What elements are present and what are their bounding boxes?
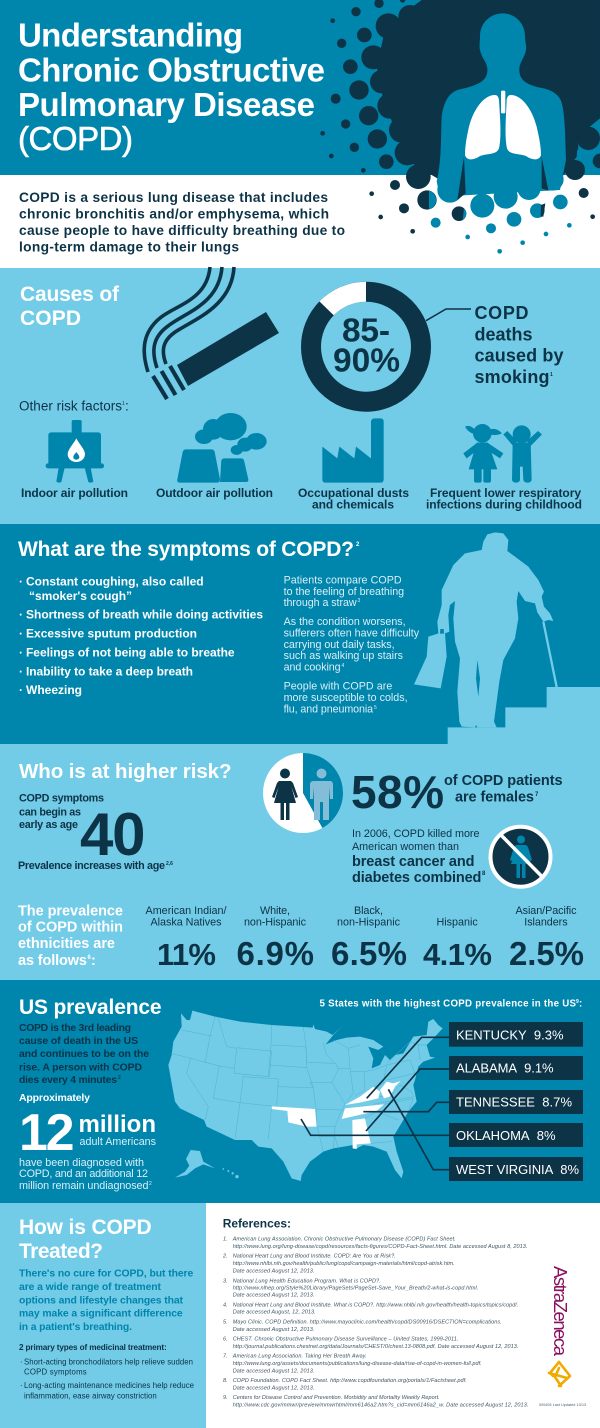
list: references: National Heart Lung and Blood Institute. What is COPD?. http://www.nhlbi.nih.gov/health/health-topics/topics/copd/.: [233, 1302, 518, 1308]
donut chart: 85-90%: 90%: [333, 343, 400, 380]
illustration: elderly person with cane on stairs: [414, 532, 600, 744]
text: symptom details: 5: [374, 705, 377, 711]
text: symptom details: and cooking: [284, 662, 341, 674]
text: age 40: Prevalence increases with age: [18, 860, 165, 872]
title: Chronic Obstructive: [18, 52, 325, 88]
list: symptoms: ·: [19, 575, 23, 589]
panel: who is at higher risk: [0, 744, 600, 980]
list: references: http://www.nhlbi.nih.gov/health/public/lung/copd/campaign-materials/html/copd-atrisk.htm.: [233, 1261, 455, 1267]
logo: AstraZeneca wordmark: AstraZeneca: [550, 1266, 571, 1357]
intro text: COPD is a serious lung disease that includes: [19, 190, 328, 205]
map: United States: [168, 1011, 450, 1181]
list: references: http://www.lung.org/assets/documents/publications/lung-disease-data/rise-of-copd-in-women-full.pdf.: [233, 1361, 482, 1367]
stat: 58% females: of COPD patients: [444, 773, 563, 789]
list: symptoms: ·: [19, 627, 23, 641]
stat: Black: 6.5%: [331, 935, 407, 972]
stat: Asian/Pacific Islanders: Asian/Pacific: [516, 905, 577, 917]
heading: higher risk: Who is at higher risk?: [19, 760, 232, 783]
list: symptoms: ·: [19, 665, 23, 679]
text: symptom details: 3: [358, 598, 360, 604]
stat: White: White,: [260, 905, 290, 917]
heading: top 5 states: 9: [576, 999, 579, 1005]
list: references: Date accessed August 12, 2013.: [233, 1293, 314, 1299]
callout: COPD deaths caused by smoking: smoking: [474, 367, 550, 387]
heading: treated: Treated?: [19, 1240, 103, 1263]
text: medicinal treatment: COPD symptoms: [24, 1367, 87, 1376]
intro text: cause people to have difficulty breathing due to: [19, 223, 345, 238]
text: leading cause of death: rise. A person with COPD: [19, 1063, 142, 1074]
illustration: body with lungs and dots: [320, 0, 600, 254]
text: 2006 comparison: In 2006, COPD killed more: [352, 828, 480, 840]
text: age 40: 40: [80, 801, 146, 868]
text: age 40: [18, 793, 173, 872]
list: references: Date accessed August 12, 2013.: [233, 1385, 314, 1391]
text: job code: 000405 Last Updated 10/13: [539, 1403, 586, 1407]
callout: COPD deaths caused by smoking: caused by: [474, 346, 564, 366]
text: 2006 comparison: diabetes combined: [352, 870, 481, 886]
callout: COPD deaths caused by smoking: COPD: [474, 303, 528, 323]
stat: American Indian / Alaska Natives: American Indian/: [146, 905, 226, 917]
stat: Hispanic: 4.1%: [423, 937, 492, 972]
label: respiratory infections: infections during childhood: [426, 498, 582, 512]
stat: 58% females: 58%: [351, 766, 444, 818]
label: Tennessee: [449, 1090, 583, 1114]
text: no cure: There's no cure for COPD, but there: [19, 1269, 194, 1280]
panel: header: [0, 0, 600, 268]
list: symptoms: Shortness of breath while doing activities: [26, 608, 263, 622]
text: no cure: options and lifestyle changes that: [19, 1295, 184, 1306]
list: references: 8.: [223, 1378, 228, 1384]
list: references: http://www.lung.org/lung-disease/copd/resources/facts-figures/COPD-Fact-Sheet.html. Date accessed August 8, 2013.: [233, 1244, 527, 1250]
label: respiratory infections: Frequent lower respiratory: [430, 486, 581, 500]
stat: Black: [331, 905, 407, 972]
callout: COPD deaths caused by smoking: deaths: [474, 325, 532, 345]
pie chart: 58% female: [263, 753, 343, 833]
stat: 12 million: million remain undiagnosed: [19, 1180, 148, 1192]
label: Kentucky: [449, 1022, 583, 1047]
text: prevalence within ethnicities: 6: [88, 955, 92, 961]
heading: causes: [20, 283, 120, 330]
icon: no-woman sign: [490, 827, 550, 887]
heading: references: References:: [223, 1217, 291, 1231]
label: occupational dusts: and chemicals: [312, 498, 394, 512]
text: leading cause of death: 2: [118, 1075, 121, 1081]
stat: 58% females: 7: [535, 792, 539, 798]
label: West Virginia: [449, 1157, 583, 1181]
text: 2006 comparison: [352, 828, 486, 886]
title: (COPD): [18, 120, 133, 157]
label: occupational dusts: Occupational dusts: [298, 486, 409, 500]
text: age 40: early as age: [19, 819, 78, 831]
label: outdoor air pollution: Outdoor air pollution: [156, 486, 273, 500]
title: [18, 16, 325, 157]
label: Alabama: ALABAMA 9.1%: [456, 1061, 554, 1076]
label: occupational dusts: [298, 486, 409, 512]
text: medicinal treatment: [19, 1343, 194, 1400]
list: references: American Lung Association. Chronic Obstructive Pulmonary Disease (COPD) Fact Sheet.: [232, 1237, 456, 1243]
text: symptom details: People with COPD are: [284, 680, 392, 692]
text: symptom details: 4: [342, 663, 344, 669]
list: references: National Heart Lung and Blood Institute. COPD: Are You at Risk?.: [233, 1254, 396, 1260]
stat: Asian/Pacific Islanders: Islanders: [524, 917, 568, 929]
stat: 58% females: [351, 766, 563, 818]
list: references: 9.: [223, 1395, 228, 1401]
callout: COPD deaths caused by smoking: 1: [550, 372, 553, 378]
list: symptoms: ·: [19, 608, 23, 622]
stat: 12 million: 12: [19, 1104, 75, 1162]
text: symptom details: more susceptible to colds,: [284, 692, 408, 704]
leader lines: states to labels: [301, 1037, 450, 1170]
label: Oklahoma: [449, 1123, 583, 1147]
stat: 12 million: adult Americans: [80, 1136, 156, 1148]
list: references: 6.: [223, 1336, 228, 1342]
callout: COPD deaths caused by smoking: [426, 303, 564, 387]
stat: Asian/Pacific Islanders: 2.5%: [509, 935, 584, 972]
list: references: http://journal.publications.chestnet.org/data/Journals/CHEST/0/chest.13-0808.pdf. Date accessed August 12, 2013.: [233, 1344, 518, 1350]
donut chart: 85-90%: [311, 282, 421, 402]
text: 2006 comparison: 8: [482, 871, 486, 877]
list: references: [222, 1237, 528, 1408]
stat: Asian/Pacific Islanders: [509, 905, 584, 972]
text: symptom details: sufferers often have difficulty: [284, 628, 420, 640]
panel: symptoms: [0, 524, 600, 744]
text: prevalence within ethnicities: [18, 904, 123, 969]
heading: treated: [19, 1216, 152, 1263]
text: 2006 comparison: breast cancer and: [352, 854, 474, 870]
list: references: 5.: [223, 1320, 228, 1326]
label: Kentucky: KENTUCKY 9.3%: [456, 1027, 564, 1042]
text: no cure: are a wide range of treatment: [19, 1282, 162, 1293]
heading: symptoms: 2: [356, 542, 360, 548]
intro text: long-term damage to their lungs: [19, 240, 239, 254]
icon: indoor stove: [46, 420, 104, 483]
list: references: 1.: [223, 1237, 228, 1243]
list: references: COPD Foundation. COPD Fact Sheet. http://www.copdfoundation.org/portals/1/Factsheet.pdf.: [233, 1378, 467, 1384]
stat: White: non-Hispanic: [244, 917, 307, 929]
list: references: American Lung Association. Taking Her Breath Away.: [232, 1354, 367, 1360]
text: symptom details: through a straw: [284, 597, 357, 609]
text: age 40: 2,6: [166, 861, 173, 867]
text: medicinal treatment: Short-acting bronchodilators help relieve sudden: [24, 1357, 193, 1366]
label: respiratory infections: [426, 486, 582, 512]
text: medicinal treatment: ·: [20, 1381, 23, 1390]
logo: AstraZeneca symbol: [549, 1362, 570, 1386]
list: references: CHEST. Chronic Obstructive Pulmonary Disease Surveillance – United States, 1999-2011.: [233, 1336, 458, 1342]
heading: US prevalence: US prevalence: [19, 996, 162, 1019]
heading: causes: Causes of: [20, 283, 120, 306]
heading: causes: COPD: [20, 307, 81, 330]
list: symptoms: ·: [19, 683, 23, 697]
stat: Black: Black,: [354, 905, 383, 917]
list: symptoms: Excessive sputum production: [26, 627, 197, 641]
text: no cure: [19, 1269, 194, 1333]
list: references: 2.: [222, 1254, 228, 1260]
list: references: Date accessed August, 12, 2013.: [233, 1310, 316, 1316]
text: prevalence within ethnicities: The prevalence: [18, 904, 123, 920]
text: medicinal treatment: inflammation, ease airway constriction: [24, 1391, 157, 1400]
icon: children: [463, 424, 542, 483]
text: leading cause of death: and continues to be on the: [19, 1049, 149, 1060]
list: references: Centers for Disease Control and Prevention. Morbidity and Mortality Weekly Report.: [233, 1395, 440, 1401]
list: references: 3.: [223, 1278, 228, 1284]
stat: White: [236, 905, 314, 972]
text: leading cause of death: dies every 4 minutes: [19, 1075, 117, 1086]
text: age 40: COPD symptoms: [19, 793, 104, 805]
panel: references: [206, 1203, 600, 1428]
text: other risk factors: Other risk factors: [19, 399, 122, 414]
intro text: [19, 190, 345, 254]
heading: symptoms: What are the symptoms of COPD?: [18, 538, 354, 561]
text: symptom details: As the condition worsens,: [284, 616, 406, 628]
stat: 12 million: have been diagnosed with: [19, 1157, 144, 1169]
text: medicinal treatment: 2 primary types of medicinal treatment:: [19, 1343, 167, 1352]
text: 2006 comparison: American women than: [352, 841, 459, 853]
list: symptoms: ·: [19, 646, 23, 660]
list: references: Date accessed August 12, 2013.: [233, 1327, 314, 1333]
heading: top 5 states: 5 States with the highest COPD prevalence in the US: [320, 999, 577, 1010]
panel: how is COPD treated: [0, 1203, 206, 1428]
text: prevalence within ethnicities: :: [91, 953, 96, 969]
text: other risk factors: 1: [122, 401, 125, 407]
list: symptoms: Feelings of not being able to breathe: [26, 646, 235, 660]
label: West Virginia: WEST VIRGINIA 8%: [456, 1162, 579, 1177]
icon: cigarette: [144, 267, 279, 399]
text: symptom details: Patients compare COPD: [284, 574, 402, 586]
stat: White: 6.9%: [236, 935, 314, 972]
label: Oklahoma: OKLAHOMA 8%: [456, 1128, 556, 1143]
stat: 12 million: [19, 1092, 156, 1192]
stat: American Indian / Alaska Natives: [146, 905, 226, 972]
text: no cure: may make a significant difference: [19, 1309, 183, 1320]
text: other risk factors: :: [125, 399, 129, 414]
text: age 40: can begin as: [19, 807, 81, 819]
icon: factory: [322, 418, 384, 483]
list: references: 7.: [223, 1354, 228, 1360]
list: symptoms: Constant coughing, also called: [26, 575, 204, 589]
stat: Black: non-Hispanic: [337, 917, 401, 929]
text: prevalence within ethnicities: as follows: [18, 953, 87, 969]
title: Pulmonary Disease: [18, 86, 315, 123]
text: symptom details: [284, 574, 420, 715]
text: prevalence within ethnicities: ethnicities are: [18, 936, 115, 952]
list: symptoms: “smoker's cough”: [29, 589, 132, 603]
icon: outdoor pollution: [177, 413, 267, 483]
text: symptom details: to the feeling of breathing: [284, 586, 404, 598]
list: references: http://www.cdc.gov/mmwr/preview/mmwrhtml/mm6146a2.htm?s_cid=mm6146a2_w. Date accessed August 12, 2013.: [233, 1402, 528, 1408]
text: medicinal treatment: ·: [20, 1357, 23, 1366]
list: symptoms: Inability to take a deep breath: [26, 665, 193, 679]
list: symptoms: [19, 575, 263, 697]
label: indoor air pollution: Indoor air pollution: [21, 486, 128, 500]
stat: American Indian / Alaska Natives: 11%: [157, 937, 216, 972]
list: references: http://www.nlhep.org/Style%20Library/PageSets/PageSet-Save_Your_Breath/2-what-is-copd.html.: [233, 1285, 478, 1291]
list: references: Date accessed August 12, 2013.: [233, 1368, 314, 1374]
text: medicinal treatment: Long-acting maintenance medicines help reduce: [24, 1381, 194, 1390]
list: references: Mayo Clinic. COPD Definition. http://www.mayoclinic.com/health/copd/DS00916/DSECTION=complications.: [233, 1320, 502, 1326]
intro text: chronic bronchitis and/or emphysema, which: [19, 206, 329, 222]
stat: Hispanic: Hispanic: [436, 917, 478, 929]
stat: 12 million: million: [78, 1111, 156, 1138]
title: Understanding: [18, 16, 243, 54]
stat: 12 million: 2: [149, 1181, 152, 1187]
list: references: National Lung Health Education Program. What is COPD?.: [233, 1278, 381, 1284]
text: prevalence within ethnicities: of COPD within: [18, 920, 123, 936]
list: references: Date accessed August 12, 2013.: [233, 1268, 314, 1274]
text: no cure: in a patient's breathing.: [19, 1322, 132, 1333]
list: symptoms: Wheezing: [26, 683, 82, 697]
text: symptom details: flu, and pneumonia: [284, 703, 373, 715]
text: symptom details: such as walking up stairs: [284, 650, 403, 662]
donut chart: 85-90%: 85-: [342, 313, 390, 350]
stat: Hispanic: [423, 917, 492, 972]
label: Alabama: [449, 1056, 583, 1080]
stat: 12 million: COPD, and an additional 12: [19, 1168, 148, 1180]
list: references: 4.: [223, 1302, 228, 1308]
panel: causes of COPD: [0, 267, 600, 524]
stat: 12 million: Approximately: [19, 1092, 90, 1104]
label: Tennessee: TENNESSEE 8.7%: [456, 1095, 572, 1110]
text: leading cause of death: [19, 1023, 149, 1086]
text: leading cause of death: COPD is the 3rd leading: [19, 1023, 131, 1034]
heading: treated: How is COPD: [19, 1216, 152, 1239]
text: leading cause of death: cause of death in the US: [19, 1036, 138, 1047]
stat: 58% females: are females: [455, 790, 534, 806]
text: symptom details: carrying out daily tasks,: [284, 639, 395, 651]
heading: top 5 states: :: [579, 999, 582, 1010]
panel: US prevalence: [0, 980, 600, 1203]
stat: American Indian / Alaska Natives: Alaska Natives: [150, 917, 222, 929]
